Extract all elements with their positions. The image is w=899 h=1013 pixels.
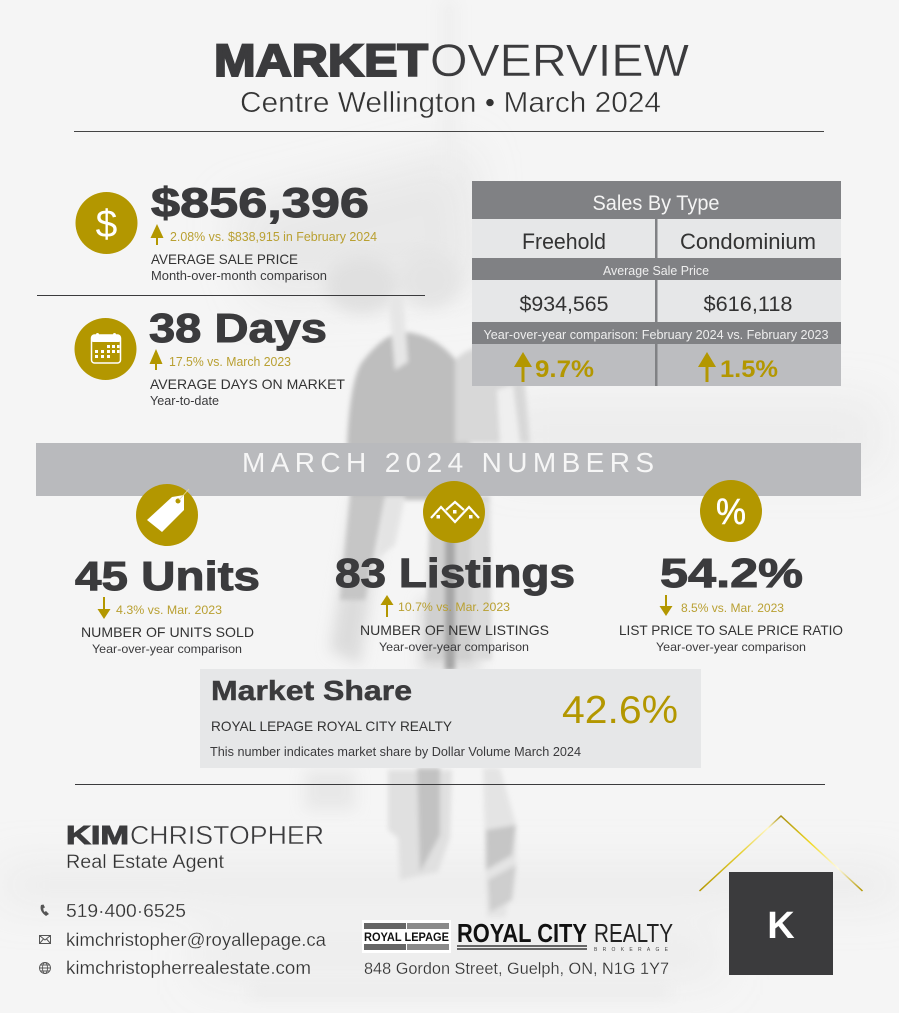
icon: calendar xyxy=(74,318,136,380)
logo: royal lepage royal city realty: ROYAL LEPAGE xyxy=(364,930,449,944)
label: NUMBER OF UNITS SOLD xyxy=(81,624,254,640)
subtitle: Centre Wellington • March 2024 xyxy=(240,87,661,119)
stat: list to sale ratio xyxy=(619,480,843,654)
band: comparison: Year-over-year comparison: February 2024 vs. February 2023 xyxy=(484,328,829,342)
note: Year-over-year comparison xyxy=(92,642,242,656)
change: 8.5% vs. Mar. 2023 xyxy=(681,601,784,615)
note: This number indicates market share by Dollar Volume March 2024 xyxy=(210,745,581,759)
condominium change: 1.5% xyxy=(720,356,778,383)
icon: globe xyxy=(40,962,50,974)
change: 10.7% vs. Mar. 2023 xyxy=(398,600,510,614)
icon: dollar coin: $ xyxy=(96,203,118,246)
phone: 519·400·6525 xyxy=(66,901,186,921)
address: 848 Gordon Street, Guelph, ON, N1G 1Y7 xyxy=(364,959,669,978)
icon: percent xyxy=(700,480,762,542)
heading: Sales By Type xyxy=(592,192,720,215)
logo: royal lepage royal city realty: BROKERAGE xyxy=(594,947,669,953)
title xyxy=(214,35,690,86)
contact details xyxy=(40,901,327,978)
icon: percent: % xyxy=(716,491,746,532)
freehold price: $934,565 xyxy=(520,293,608,316)
value: 83 Listings xyxy=(335,550,575,596)
title: MARKET xyxy=(214,35,428,86)
value: 45 Units xyxy=(75,553,260,599)
value: 42.6% xyxy=(562,689,678,732)
logo: K house: K xyxy=(767,905,795,947)
note: Year-over-year comparison xyxy=(379,640,529,654)
panel: market share xyxy=(200,669,701,768)
stat: average sale price xyxy=(76,179,377,283)
value: $856,396 xyxy=(151,179,369,226)
arrow down xyxy=(98,597,110,619)
value: 38 Days xyxy=(149,305,327,351)
column: condominium: Condominium xyxy=(680,229,816,254)
icon: phone xyxy=(41,904,49,916)
icon: envelope xyxy=(40,936,50,944)
logo: royal lepage royal city realty: ROYAL CITY xyxy=(457,918,587,948)
title: OVERVIEW xyxy=(430,35,690,86)
email: kimchristopher@royallepage.ca xyxy=(66,930,327,950)
agent title: Real Estate Agent xyxy=(66,852,225,873)
note: Month-over-month comparison xyxy=(151,269,327,283)
banner: march 2024 numbers xyxy=(36,443,861,496)
change: 17.5% vs. March 2023 xyxy=(169,354,291,369)
icon: price tag xyxy=(136,484,198,546)
arrow up xyxy=(380,595,394,617)
label: NUMBER OF NEW LISTINGS xyxy=(360,622,549,638)
band: average sale price: Average Sale Price xyxy=(603,264,709,278)
note: Year-to-date xyxy=(150,394,219,408)
logo: royal lepage royal city realty: REALTY xyxy=(594,918,673,948)
value: 54.2% xyxy=(660,550,803,596)
icon: houses xyxy=(423,481,485,543)
note: Year-over-year comparison xyxy=(656,640,806,654)
banner: march 2024 numbers: MARCH 2024 NUMBERS xyxy=(242,447,654,478)
logo: royal lepage royal city realty xyxy=(362,918,673,953)
website: kimchristopherrealestate.com xyxy=(66,958,311,978)
brokerage: ROYAL LEPAGE ROYAL CITY REALTY xyxy=(211,718,453,734)
condominium price: $616,118 xyxy=(704,293,792,316)
panel: sales by type xyxy=(472,181,841,386)
change: 2.08% vs. $838,915 in February 2024 xyxy=(170,229,377,244)
change: 4.3% vs. Mar. 2023 xyxy=(116,603,222,617)
freehold change: 9.7% xyxy=(535,356,594,383)
stat: new listings xyxy=(335,481,575,654)
label: LIST PRICE TO SALE PRICE RATIO xyxy=(619,622,843,638)
logo: K house xyxy=(700,816,862,975)
arrow up xyxy=(150,224,164,245)
agent name: KIM xyxy=(66,820,129,850)
label: AVERAGE SALE PRICE xyxy=(151,251,298,267)
heading: Market Share xyxy=(211,675,412,706)
label: AVERAGE DAYS ON MARKET xyxy=(150,376,345,392)
arrow down xyxy=(660,595,672,616)
condominium change xyxy=(698,352,778,383)
stat: average days on market xyxy=(74,305,345,408)
agent name: CHRISTOPHER xyxy=(130,820,324,850)
icon: dollar coin xyxy=(76,192,138,254)
arrow up xyxy=(150,349,162,370)
freehold change xyxy=(514,352,594,383)
column: freehold: Freehold xyxy=(522,229,606,254)
stat: units sold xyxy=(75,484,260,656)
